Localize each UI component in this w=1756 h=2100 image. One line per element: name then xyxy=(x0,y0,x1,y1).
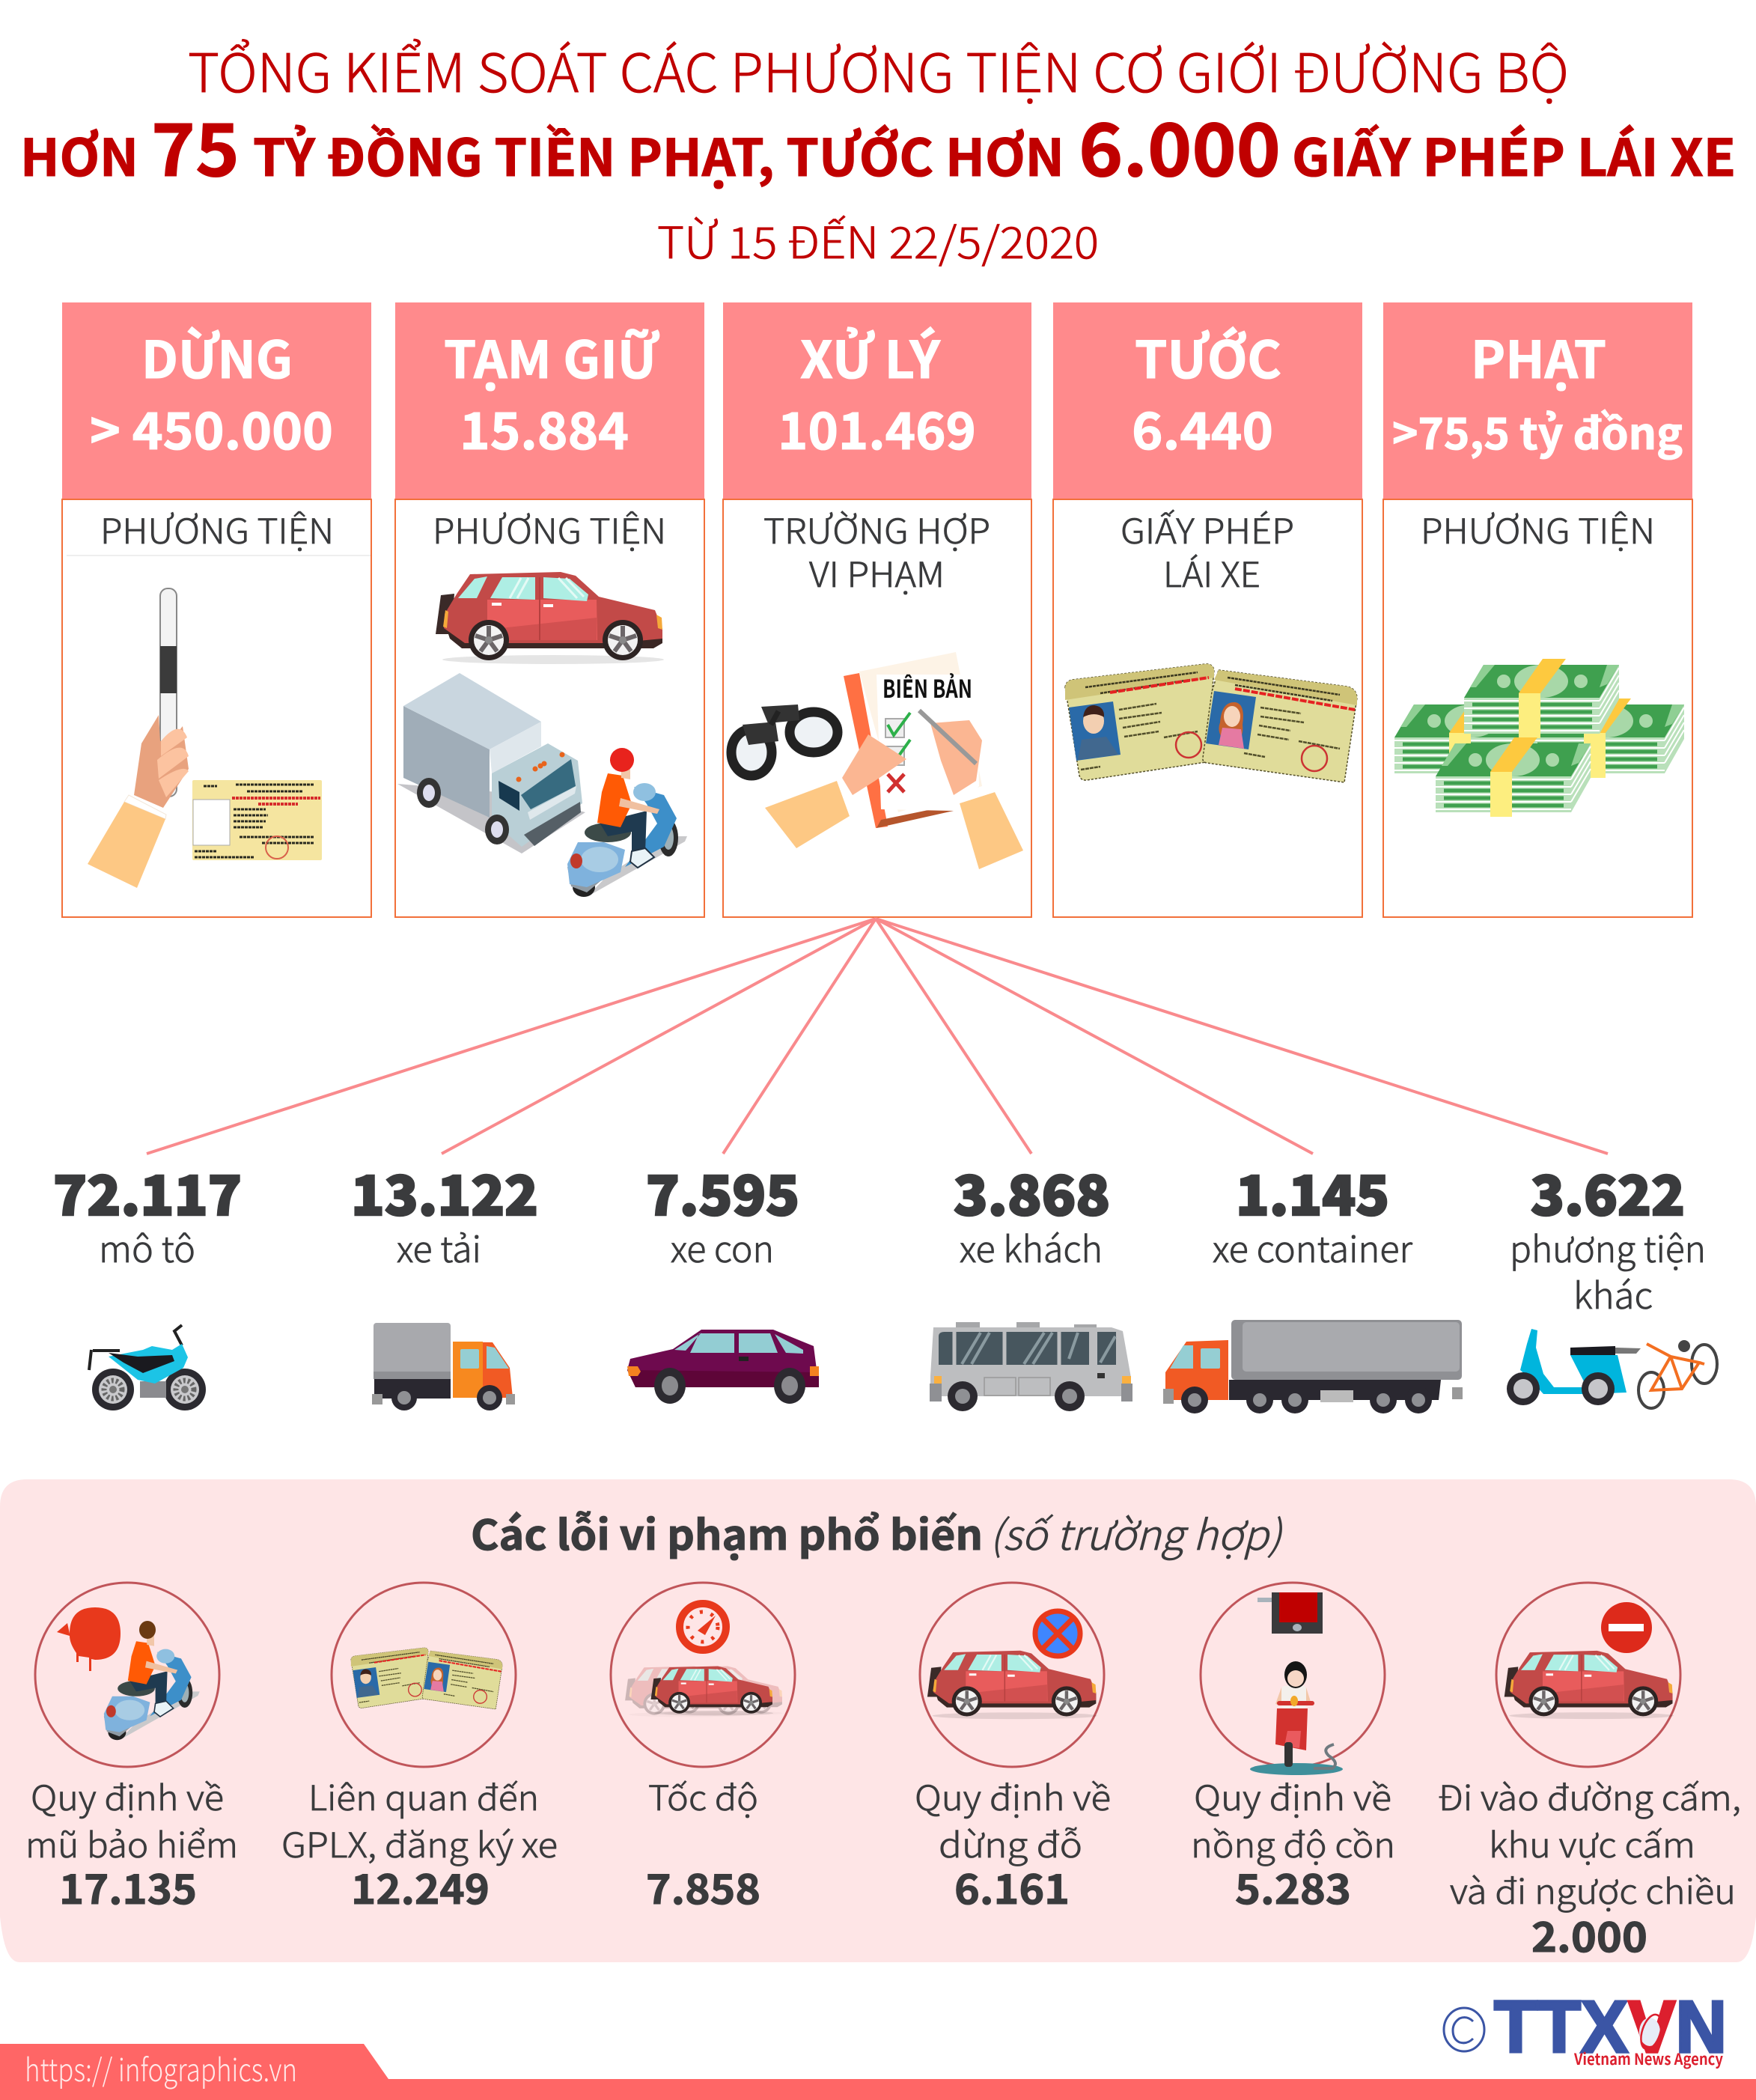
icon: delivery truck xyxy=(397,673,585,853)
panel: tước xyxy=(1053,302,1362,917)
stat: xe tải: xe tải xyxy=(397,1220,481,1273)
panel: tước: GIẤY PHÉP xyxy=(1121,505,1294,554)
footer bar: https:// infographics.vn xyxy=(25,2045,297,2091)
stat: xe container xyxy=(1163,1152,1463,1413)
stat: phương tiện khác: khác xyxy=(1573,1267,1653,1319)
title line 2: 6.000 xyxy=(1079,91,1281,197)
icon: car xyxy=(927,1651,1097,1719)
panel: xử lý xyxy=(723,302,1031,917)
label: 12.249 xyxy=(351,1856,490,1916)
icon: no entry sign xyxy=(1601,1602,1652,1653)
logo: TTXVN: Vietnam News Agency xyxy=(1573,2048,1723,2070)
label: và đi ngược chiều xyxy=(1450,1865,1736,1914)
label xyxy=(25,1771,238,1916)
icon: purple car xyxy=(627,1330,819,1404)
label: nồng độ cồn xyxy=(1191,1819,1395,1868)
panel: dừng xyxy=(62,302,371,917)
stat: mô tô xyxy=(53,1152,242,1410)
label: mũ bảo hiểm xyxy=(25,1819,238,1868)
title line 2: TỶ ĐỒNG TIỀN PHẠT, TƯỚC HƠN xyxy=(253,117,1064,191)
label: 2.000 xyxy=(1531,1904,1647,1964)
stat: xe khách: 3.868 xyxy=(954,1152,1110,1232)
label xyxy=(1438,1771,1741,1964)
violation: GPLX xyxy=(281,1583,558,1916)
icon: bus xyxy=(930,1322,1132,1411)
title xyxy=(20,31,1736,271)
heading xyxy=(471,1502,1283,1562)
icon: money stacks xyxy=(1394,659,1684,817)
violation: mũ bảo hiểm xyxy=(25,1583,238,1916)
panel: dừng: PHƯƠNG TIỆN xyxy=(100,505,334,554)
violation: đường cấm xyxy=(1438,1583,1741,1964)
panel: tạm giữ xyxy=(395,302,704,917)
icon: rider without helmet xyxy=(104,1621,200,1740)
heading: (số trường hợp) xyxy=(990,1502,1283,1562)
title line 2: 75 xyxy=(151,91,240,197)
label xyxy=(915,1771,1111,1916)
label: Liên quan đến xyxy=(308,1771,539,1821)
label: Quy định về xyxy=(1194,1771,1391,1821)
icon: scooter xyxy=(1507,1329,1641,1405)
icon: speedometer xyxy=(680,1604,726,1650)
panel: dừng: > 450.000 xyxy=(90,390,333,464)
label xyxy=(281,1771,558,1916)
icon: driving licence xyxy=(192,780,322,860)
panel: phạt xyxy=(1383,302,1692,917)
panel: tạm giữ: PHƯƠNG TIỆN xyxy=(433,505,666,554)
violation: nồng độ cồn xyxy=(1191,1583,1395,1916)
stat: mô tô: mô tô xyxy=(99,1220,195,1273)
icon: traffic baton in hand xyxy=(88,588,189,888)
panel: xử lý: TRƯỜNG HỢP xyxy=(763,505,990,554)
violation: tốc độ xyxy=(611,1583,795,1916)
stat: xe khách: xe khách xyxy=(960,1220,1103,1273)
panel: xử lý: 101.469 xyxy=(778,390,976,464)
title date: TỪ 15 ĐẾN 22/5/2020 xyxy=(657,208,1099,271)
stat: xe khách xyxy=(930,1152,1132,1411)
panel: xử lý: VI PHẠM xyxy=(809,548,945,597)
icon: container truck xyxy=(1163,1320,1463,1413)
panel: xử lý: XỬ LÝ xyxy=(800,319,941,393)
label: 17.135 xyxy=(59,1856,197,1916)
connector lines xyxy=(147,919,1608,1154)
stat: xe tải: 13.122 xyxy=(351,1152,538,1232)
label: 6.161 xyxy=(954,1856,1070,1916)
label xyxy=(1191,1771,1395,1916)
label xyxy=(646,1771,760,1916)
icon: car xyxy=(1505,1651,1674,1719)
panel: tước: TƯỚC xyxy=(1135,319,1281,393)
title line 2 xyxy=(20,91,1736,197)
stat: xe container: xe container xyxy=(1213,1220,1413,1273)
label: dừng đỗ xyxy=(939,1819,1082,1868)
stat: xe container: 1.145 xyxy=(1236,1152,1389,1232)
label: khu vực cấm xyxy=(1489,1819,1695,1868)
panel: tước: 6.440 xyxy=(1132,390,1273,464)
label: 7.858 xyxy=(646,1856,760,1916)
label: GPLX, đăng ký xe xyxy=(281,1819,558,1868)
stat: xe con: 7.595 xyxy=(646,1152,799,1232)
title line 2: GIẤY PHÉP LÁI XE xyxy=(1292,117,1736,191)
stat: mô tô: 72.117 xyxy=(53,1152,242,1232)
panel: tạm giữ: TẠM GIỮ xyxy=(444,319,659,393)
stat: xe con: xe con xyxy=(671,1220,774,1273)
heading: Các lỗi vi phạm phổ biến xyxy=(471,1502,983,1562)
violation: dừng đỗ xyxy=(915,1583,1111,1916)
label: Quy định về xyxy=(915,1771,1111,1821)
panel: phạt: PHẠT xyxy=(1471,319,1606,393)
icon: violation record clipboard: BIÊN BẢN xyxy=(882,669,972,705)
footer bar xyxy=(0,2044,1756,2100)
panel: dừng: DỪNG xyxy=(141,319,293,393)
icon: motorbike xyxy=(89,1325,206,1410)
icon: red car xyxy=(436,572,664,664)
logo: TTXVN: TTXVN xyxy=(1494,1985,1727,2068)
panel: phạt: PHƯƠNG TIỆN xyxy=(1421,505,1655,554)
panel: tước: LÁI XE xyxy=(1163,548,1260,597)
title line 1: TỔNG KIỂM SOÁT CÁC PHƯƠNG TIỆN CƠ GIỚI ĐƯỜNG BỘ xyxy=(188,31,1569,108)
icon: no parking sign xyxy=(1035,1611,1080,1656)
icon: helmet xyxy=(57,1607,121,1671)
icon: scooter rider xyxy=(567,748,687,897)
panel: tạm giữ: 15.884 xyxy=(460,390,629,464)
title line 2: HƠN xyxy=(20,117,138,191)
label: 5.283 xyxy=(1235,1856,1351,1916)
icon: violation record clipboard xyxy=(765,652,1023,869)
label: Quy định về xyxy=(31,1771,224,1821)
icon: truck xyxy=(372,1323,515,1410)
stat: xe tải xyxy=(351,1152,538,1410)
icon: driving licences xyxy=(1065,664,1357,782)
icon: drunk rider xyxy=(1250,1661,1343,1775)
icon: breathalyzer xyxy=(1257,1592,1323,1634)
icon: licences xyxy=(351,1648,502,1709)
icon: speeding car xyxy=(625,1667,783,1717)
icon: handcuffs xyxy=(731,704,838,776)
icon: bicycle xyxy=(1638,1340,1717,1408)
stat: xe con xyxy=(627,1152,819,1404)
stat: phương tiện khác: phương tiện xyxy=(1510,1220,1706,1273)
label: Tốc độ xyxy=(648,1771,758,1821)
panel: common violations xyxy=(0,1479,1756,1964)
panel: phạt: >75,5 tỷ đồng xyxy=(1392,399,1683,462)
label: Đi vào đường cấm, xyxy=(1438,1771,1741,1821)
stat: phương tiện khác xyxy=(1507,1152,1717,1408)
stat: phương tiện khác: 3.622 xyxy=(1531,1152,1685,1232)
